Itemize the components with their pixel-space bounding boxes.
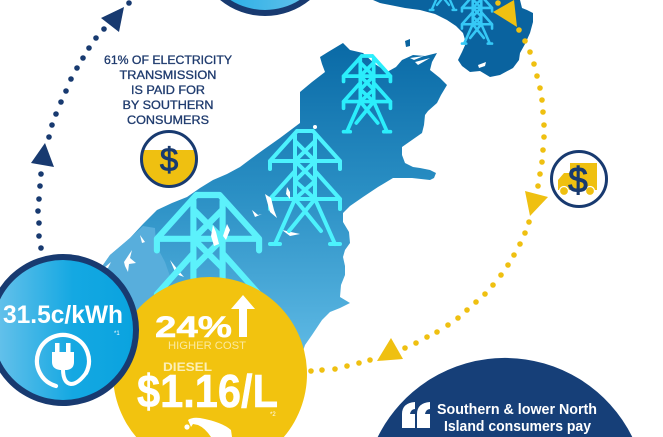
tower: central: [270, 131, 340, 244]
map: lakes and inlets: [104, 56, 430, 277]
icon: truck with dollar: $: [568, 161, 588, 200]
label: higher cost: HIGHER COST: [168, 340, 246, 352]
label: diesel: DIESEL: [163, 360, 212, 374]
icon: half-filled dollar coin: $: [160, 141, 178, 178]
tower: north island left: [430, 0, 456, 10]
dotted arrow: yellow path, right side: [308, 0, 548, 374]
quote text: Southern & lower North: [437, 402, 597, 418]
dotted arrow: navy path, upper left: [31, 0, 132, 251]
quote text: [437, 402, 597, 435]
stat: diesel price: $1.16/L: [137, 365, 278, 417]
stat: 31.5c/kWh: 31.5c/kWh: [3, 301, 123, 329]
text: 61% of electricity transmission: [104, 55, 232, 127]
icon: quotation mark: [402, 402, 430, 428]
lakes over towers: [211, 187, 290, 246]
navy circle: quote: [378, 358, 632, 437]
icon: half-filled dollar coin: [142, 132, 196, 186]
map: Wellington harbour detail: [478, 62, 486, 68]
stat: 24% higher: 24%: [155, 311, 232, 344]
map: North Island: [373, 0, 533, 77]
quote text: Island consumers pay: [444, 419, 591, 435]
text: 61% of electricity transmission: BY SOUTHERN: [122, 100, 214, 112]
icon: plug: [37, 335, 89, 386]
text: 61% of electricity transmission: CONSUMERS: [127, 115, 209, 127]
icon: truck with dollar: [552, 152, 606, 206]
map: fiordland lighter zone: [103, 226, 172, 320]
icon: fuel nozzle: [184, 418, 232, 437]
map: Marlborough Sounds islets: [405, 39, 410, 47]
tower: southern large: [157, 195, 259, 294]
text: 61% of electricity transmission: TRANSMISSION: [120, 70, 216, 82]
blue circle: electricity price: [0, 254, 139, 406]
tower: north island right: [462, 0, 492, 44]
yellow circle: diesel cost: [113, 277, 307, 437]
footnote 1: *1: [114, 331, 120, 337]
text: 61% of electricity transmission: IS PAID FOR: [131, 85, 205, 97]
text: 61% of electricity transmission: 61% OF ELECTRICITY: [104, 55, 232, 67]
footnote 2: *2: [270, 412, 276, 418]
map: South Island: [103, 43, 447, 420]
top blue circle: [220, 0, 310, 16]
tower: nelson: [344, 56, 390, 132]
icon: up arrow: [231, 295, 255, 337]
